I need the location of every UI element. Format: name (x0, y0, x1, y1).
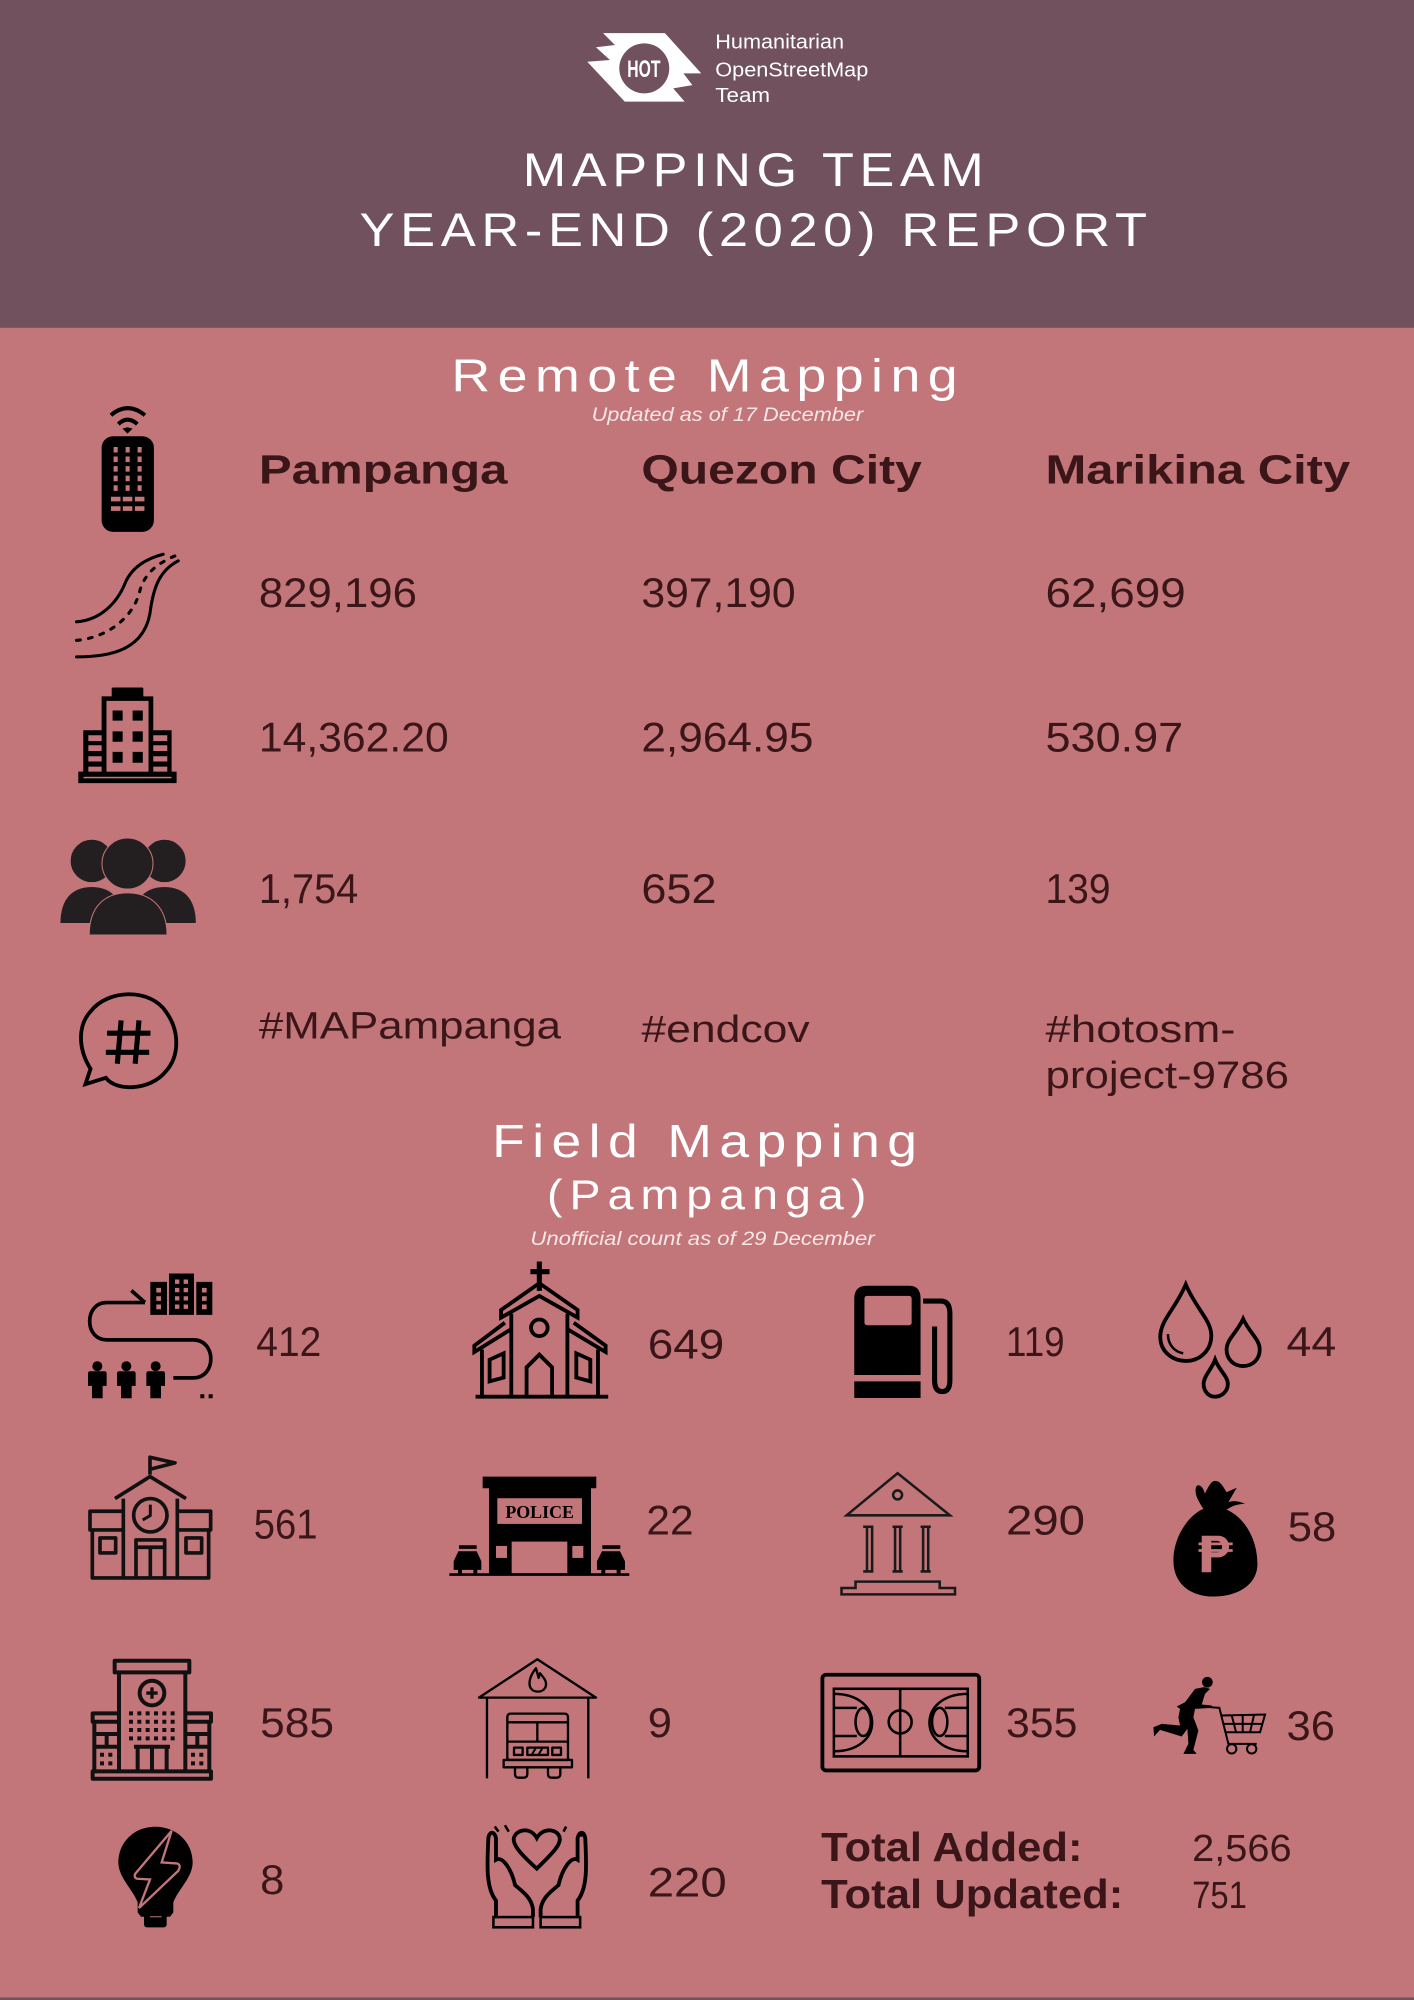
icon: people (60, 838, 196, 935)
HOT logo: Team (715, 85, 770, 107)
row: buildings: 530.97 (1046, 713, 1183, 760)
row: contributors: 139 (1046, 865, 1111, 912)
icon: hospital (93, 1661, 211, 1779)
row: buildings (259, 713, 1183, 760)
HOT logo: HOT (627, 56, 661, 83)
row: roads (259, 569, 1186, 616)
icon: light bulb (118, 1827, 193, 1927)
icon: church (474, 1261, 608, 1397)
icon: police station: POLICE (505, 1502, 574, 1522)
icon: fire station (479, 1659, 596, 1778)
section heading: remote mapping (451, 350, 965, 426)
column headers: Marikina City (1046, 446, 1351, 492)
field value: 220: 220 (648, 1859, 727, 1906)
field value: 290: 290 (1006, 1496, 1085, 1543)
totals: 751 (1192, 1874, 1247, 1917)
icon: caring hands (487, 1825, 586, 1927)
icon: police station (449, 1477, 629, 1575)
field value: 58: 58 (1288, 1503, 1336, 1550)
row: roads: 397,190 (641, 569, 796, 616)
row: roads: 62,699 (1046, 569, 1186, 616)
section heading: field mapping: Unofficial count as of 29 December (530, 1229, 875, 1250)
field value: 585: 585 (260, 1699, 334, 1746)
icon: shopper with cart (1153, 1677, 1265, 1754)
section heading: field mapping (492, 1115, 924, 1250)
row: buildings: 2,964.95 (641, 713, 813, 760)
field value: 9: 9 (648, 1699, 672, 1746)
totals: Total Added: (821, 1824, 1082, 1870)
totals: 2,566 (1192, 1827, 1292, 1870)
row: buildings: 14,362.20 (259, 713, 449, 760)
icon: hashtag bubble (81, 994, 176, 1087)
HOT logo: OpenStreetMap (715, 60, 868, 82)
column headers (259, 446, 1351, 492)
field value: 355: 355 (1006, 1699, 1077, 1746)
row: hashtags (259, 1004, 1289, 1097)
icon: fuel pump (854, 1286, 950, 1398)
section heading: field mapping: (Pampanga) (547, 1171, 873, 1218)
header band (0, 0, 1414, 328)
column headers: Pampanga (259, 446, 508, 492)
field value: 561: 561 (254, 1500, 317, 1547)
row: contributors: 1,754 (259, 865, 358, 912)
column headers: Quezon City (641, 446, 922, 492)
field value: 119: 119 (1006, 1318, 1065, 1365)
row: roads: 829,196 (259, 569, 417, 616)
section heading: field mapping: Field Mapping (492, 1115, 924, 1167)
icon: water drops (1160, 1284, 1260, 1397)
title: MAPPING TEAM (523, 143, 989, 196)
field value: 44: 44 (1286, 1318, 1336, 1365)
bottom edge band (0, 1997, 1414, 2000)
HOT logo: Humanitarian (715, 31, 844, 53)
field value: 36: 36 (1286, 1702, 1335, 1749)
field value: 412: 412 (256, 1318, 321, 1365)
row: hashtags: #MAPampanga (259, 1004, 562, 1047)
totals (821, 1824, 1292, 1917)
icon: building (78, 688, 177, 783)
icon: school (90, 1457, 211, 1578)
row: hashtags: #endcov (641, 1008, 810, 1051)
totals: Total Updated: (821, 1871, 1123, 1917)
row: hashtags: project-9786 (1046, 1054, 1289, 1097)
icon: basketball court (822, 1675, 979, 1770)
field value: 8: 8 (260, 1856, 284, 1903)
section heading: remote mapping: Remote Mapping (451, 350, 965, 402)
row: contributors: 652 (641, 865, 717, 912)
icon: bank (842, 1473, 955, 1594)
section heading: remote mapping: Updated as of 17 December (592, 405, 864, 426)
field value: 649: 649 (648, 1320, 724, 1367)
row: contributors (259, 865, 1111, 912)
title: YEAR-END (2020) REPORT (360, 203, 1153, 256)
icon: road (77, 554, 178, 657)
title (360, 143, 1153, 256)
icon: route to city (88, 1274, 213, 1398)
icon: money bag (1173, 1481, 1257, 1597)
field value: 22: 22 (646, 1496, 694, 1543)
HOT logo (587, 31, 868, 107)
icon: remote control (102, 408, 154, 532)
row: hashtags: #hotosm- (1046, 1008, 1235, 1051)
